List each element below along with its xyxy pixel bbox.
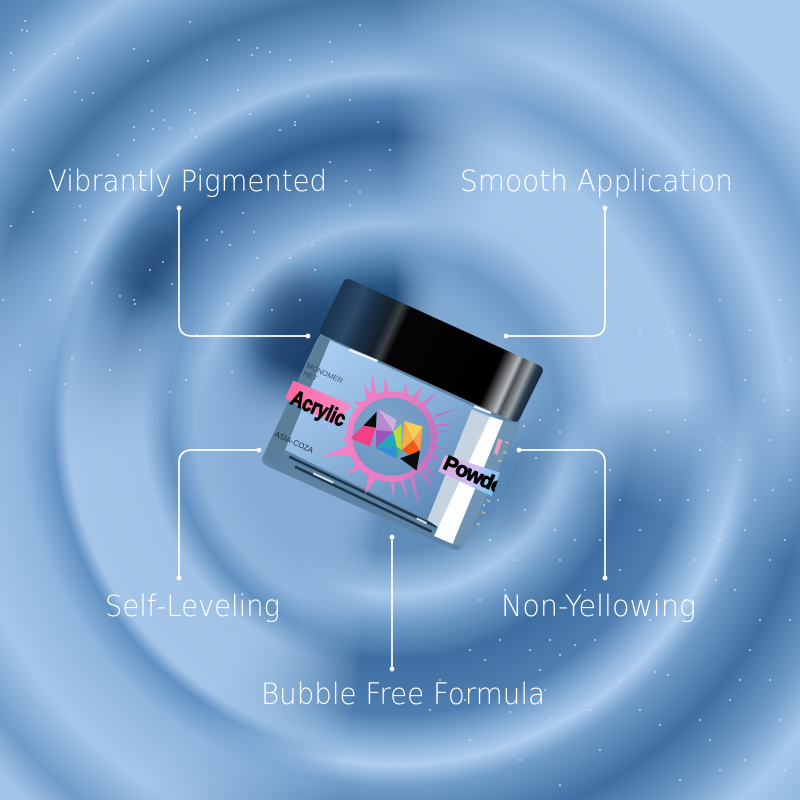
callout: Bubble Free Formula: Bubble Free Formula bbox=[261, 677, 545, 711]
callout: Non-Yellowing bbox=[501, 448, 696, 623]
logo mark bbox=[351, 409, 423, 471]
background: swirl bottom-right bbox=[208, 403, 800, 800]
callout: Vibrantly Pigmented: Vibrantly Pigmented bbox=[48, 164, 327, 198]
jar right glass edge bbox=[453, 421, 519, 547]
small label text: ASIA-COZA bbox=[273, 430, 315, 455]
callout: Smooth Application: Smooth Application bbox=[460, 164, 733, 198]
label band: Powder bbox=[438, 455, 500, 496]
small label text bbox=[273, 361, 344, 455]
label band: Acrylic: Acrylic bbox=[287, 385, 350, 432]
callout: Self-Leveling: Self-Leveling bbox=[105, 589, 280, 623]
jar glass body bbox=[262, 334, 519, 550]
background: swirl top-left bbox=[0, 0, 518, 416]
callout: Smooth Application bbox=[460, 164, 733, 338]
jar bottom glass base bbox=[275, 450, 442, 543]
callout: Vibrantly Pigmented bbox=[48, 164, 327, 338]
label splash bbox=[322, 373, 458, 512]
label band: Powder: Powder bbox=[440, 452, 514, 502]
label circle inner bbox=[353, 398, 431, 476]
background: swirl bottom-left bbox=[0, 244, 348, 800]
small label text: NET bbox=[302, 369, 319, 383]
callout: Self-Leveling bbox=[105, 448, 280, 623]
jar product shot bbox=[262, 279, 543, 550]
shadow around jar bbox=[109, 214, 575, 543]
stripes on jar bbox=[427, 409, 503, 544]
jar lid bbox=[320, 279, 543, 422]
jar left glass edge bbox=[263, 335, 330, 464]
callout: Non-Yellowing: Non-Yellowing bbox=[501, 589, 696, 623]
label band: Acrylic bbox=[285, 381, 352, 432]
small label text: MONOMER bbox=[305, 361, 344, 385]
callout: Bubble Free Formula bbox=[261, 535, 545, 711]
jar inner powder panel bbox=[285, 340, 503, 542]
background: swirl top-right bbox=[400, 0, 800, 454]
